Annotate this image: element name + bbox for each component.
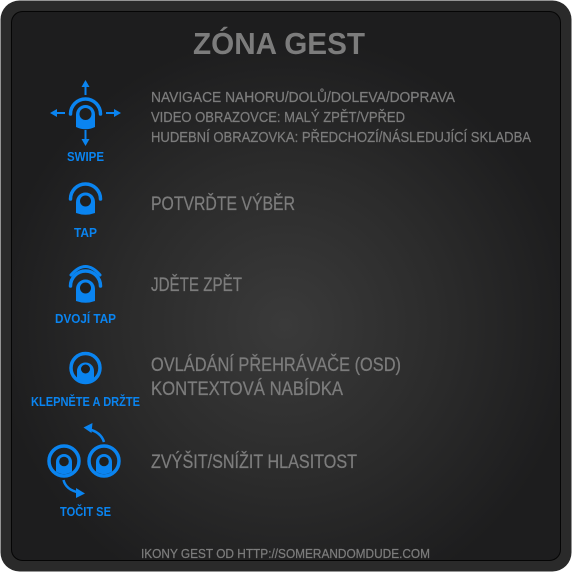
text block: swipe description bbox=[151, 88, 531, 146]
text block: tap description: POTVRĎTE VÝBĚR bbox=[151, 193, 295, 215]
text block: press and hold description: OVLÁDÁNÍ PŘEHRÁVAČE (OSD) bbox=[151, 354, 401, 376]
text block: swipe description: VIDEO OBRAZOVCE: MALÝ ZPĚT/VPŘED bbox=[151, 109, 405, 126]
icon: swipe bbox=[50, 80, 121, 146]
icon: tap bbox=[70, 184, 100, 215]
label: rotate: TOČIT SE bbox=[60, 504, 111, 519]
icon: press and hold bbox=[71, 354, 100, 382]
text block: press and hold description bbox=[151, 354, 401, 400]
text block: double tap description: JDĚTE ZPĚT bbox=[151, 274, 242, 296]
footer credit: IKONY GEST OD HTTP://SOMERANDOMDUDE.COM bbox=[141, 546, 430, 561]
label: press and hold: KLEPNĚTE A DRŽTE bbox=[31, 394, 140, 409]
icon: double tap bbox=[70, 266, 100, 303]
text block: press and hold description: KONTEXTOVÁ NABÍDKA bbox=[151, 379, 343, 400]
text block: swipe description: NAVIGACE NAHORU/DOLŮ/DOLEVA/DOPRAVA bbox=[151, 88, 455, 106]
text block: rotate description: ZVÝŠIT/SNÍŽIT HLASITOST bbox=[151, 451, 357, 473]
icon: rotate bbox=[49, 423, 119, 498]
label: swipe: SWIPE bbox=[67, 149, 104, 164]
label: tap: TAP bbox=[74, 225, 97, 240]
title: ZÓNA GEST bbox=[193, 25, 365, 61]
label: double tap: DVOJÍ TAP bbox=[55, 311, 116, 326]
